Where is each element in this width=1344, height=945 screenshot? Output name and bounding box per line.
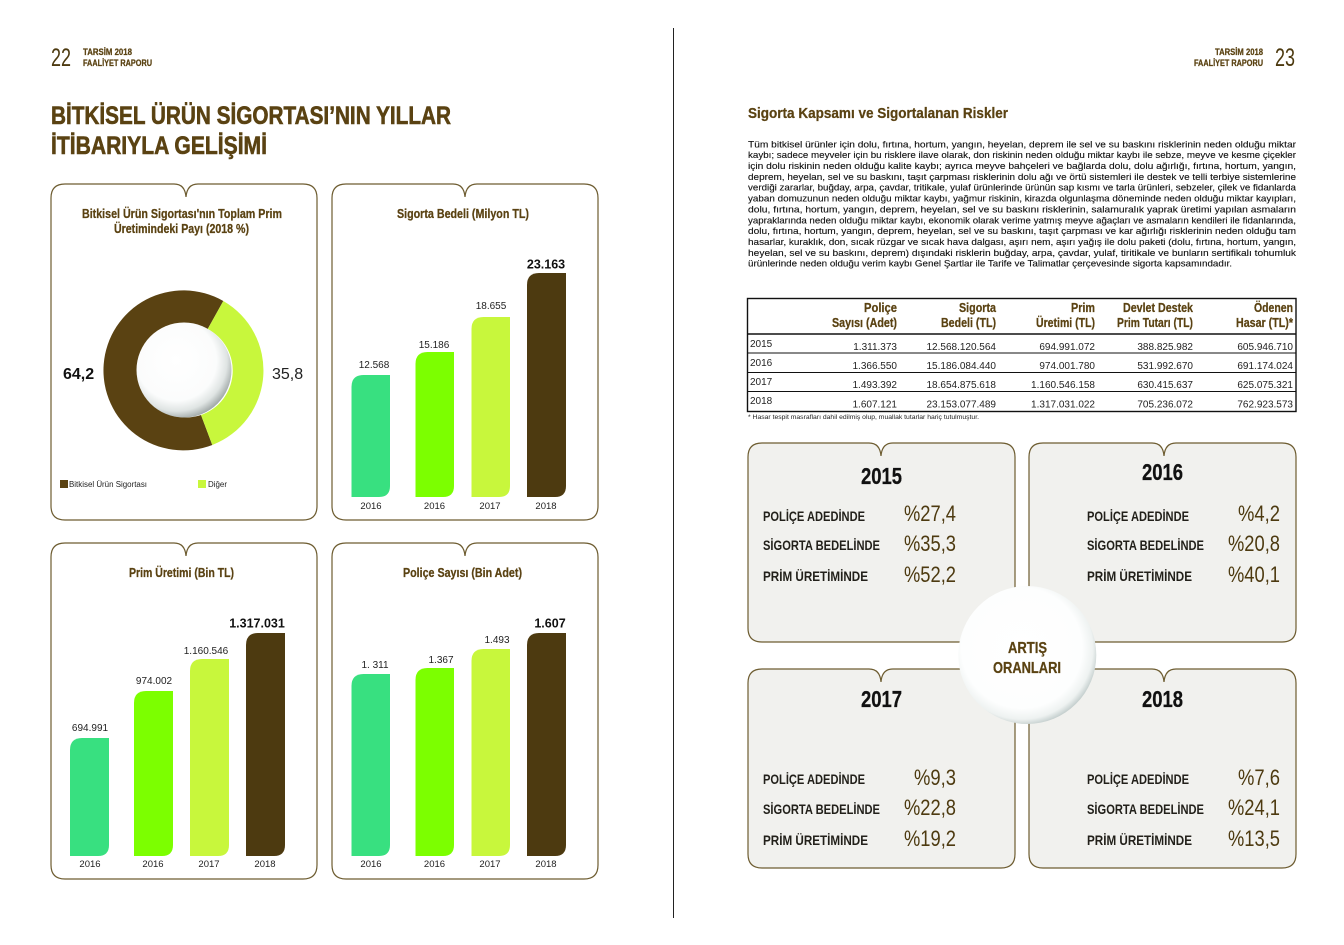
- bars: [70, 633, 285, 856]
- rates: %35,3: [904, 531, 956, 556]
- rates: POLİÇE ADEDİNDE: [763, 771, 865, 787]
- rates: POLİÇE ADEDİNDE: [1087, 771, 1189, 787]
- rates: [763, 765, 956, 851]
- panel: 2015 rates: [748, 443, 1015, 642]
- table header: Prim Tutarı (TL): [1117, 316, 1193, 330]
- table header: Poliçe: [864, 301, 897, 315]
- table row 2016: [750, 358, 1293, 372]
- rates: %7,6: [1238, 765, 1280, 790]
- rates: %52,2: [904, 562, 956, 587]
- bar years: 2016: [360, 501, 382, 512]
- bar values: 12.568: [359, 360, 390, 371]
- table header: Devlet Destek: [1123, 301, 1193, 315]
- rates: SİGORTA BEDELİNDE: [763, 537, 880, 553]
- bar values: 1.317.031: [229, 616, 285, 630]
- page header right: [1194, 44, 1295, 72]
- table row 2018: 23.153.077.489: [926, 400, 996, 410]
- body text: verdiği zararlar, buğday, arpa, çavdar, tritikale, yulaf ürünlerinde ürünün sap kısmı ve tarla ürünleri, sebzeler, çilek ve fidanlarda: [748, 183, 1296, 193]
- main title: BİTKİSEL ÜRÜN SİGORTASI’NIN YILLAR: [51, 101, 451, 130]
- table row 2018: 1.317.031.022: [1031, 400, 1095, 410]
- table row 2015: 388.825.982: [1137, 342, 1193, 353]
- table row 2016: 15.186.084.440: [926, 361, 996, 372]
- table row 2017: 625.075.321: [1237, 380, 1293, 391]
- rates: PRİM ÜRETİMİNDE: [1087, 568, 1192, 584]
- bar years: [360, 859, 557, 870]
- table header: Sayısı (Adet): [832, 316, 897, 330]
- bar years: 2016: [79, 859, 101, 870]
- table row 2015: 1.311.373: [853, 342, 897, 353]
- body text: heyelan, sel ve su baskını, deprem) dışındaki risklerin buğday, arpa, çavdar, yulaf, tiritikale ve bunların sertifikalı tohumluk: [748, 248, 1297, 258]
- panel: 2018 rates: [1029, 669, 1296, 868]
- table row 2017: 2017: [750, 377, 773, 388]
- rates: POLİÇE ADEDİNDE: [763, 508, 865, 524]
- bar values: [72, 616, 285, 734]
- rates: %22,8: [904, 795, 956, 820]
- table row 2016: 974.001.780: [1039, 361, 1095, 372]
- bar values: 1. 311: [361, 660, 389, 671]
- rates: %9,3: [914, 765, 956, 790]
- section heading: Sigorta Kapsamı ve Sigortalanan Riskler: [748, 105, 1008, 122]
- rates: %4,2: [1238, 501, 1280, 526]
- table header: Ödenen: [1254, 300, 1293, 315]
- bar years: 2016: [360, 859, 382, 870]
- rates: %19,2: [904, 826, 956, 851]
- panel: Poliçe Sayısı bar chart: [332, 543, 598, 879]
- rates: [763, 501, 956, 587]
- center badge: ARTIŞ ORANLARI: [958, 586, 1096, 724]
- rates: [1087, 765, 1280, 851]
- table row 2018: [750, 396, 1293, 410]
- table header: Üretimi (TL): [1036, 315, 1095, 330]
- donut value: 35,8: 35,8: [272, 366, 303, 383]
- panel: 2017 rates: [748, 669, 1015, 868]
- table header: Sigorta: [959, 301, 997, 315]
- bar years: 2018: [535, 859, 557, 870]
- panel heading: share: Bitkisel Ürün Sigortası'nın Toplam Prim: [82, 206, 282, 221]
- rates: PRİM ÜRETİMİNDE: [763, 568, 868, 584]
- table header: Prim: [1071, 301, 1095, 315]
- panel heading: Poliçe Sayısı: Poliçe Sayısı (Bin Adet): [403, 566, 522, 580]
- rates: SİGORTA BEDELİNDE: [763, 801, 880, 817]
- table row 2018: 705.236.072: [1137, 400, 1193, 410]
- table header: Bedeli (TL): [941, 316, 996, 330]
- bar values: 1.160.546: [184, 646, 229, 657]
- table row 2018: 2018: [750, 396, 773, 407]
- body text: için dolu riskinin neden olduğu kalite kaybı; ayrıca meyve bahçeleri ve bağlarda dolu, dolu ağırlığı, fırtına, hortum, yangın,: [748, 161, 1296, 171]
- table row 2016: 531.992.670: [1137, 361, 1193, 372]
- table row 2015: [750, 339, 1293, 353]
- bar years: 2016: [142, 859, 164, 870]
- bar years: 2018: [254, 859, 276, 870]
- bar values: 974.002: [136, 676, 173, 687]
- table footnote: * Hasar tespit masrafları dahil edilmiş olup, muallak tutarlar hariç tutulmuştur.: [748, 415, 979, 421]
- bar years: 2017: [479, 501, 501, 512]
- legend: Bitkisel Ürün Sigortası: [69, 480, 147, 489]
- body text: dolu, fırtına, hortum, yangın, deprem, heyelan, sel ve su baskını, taşıt çarpması ve kar ağırlığı risklerinin neden olduğu tam: [748, 226, 1296, 236]
- legend: Diğer: [208, 480, 227, 489]
- bar years: 2016: [424, 859, 445, 870]
- page header right: FAALİYET RAPORU: [1194, 58, 1263, 68]
- rates: %13,5: [1228, 826, 1280, 851]
- year 2017: 2017: [861, 686, 902, 712]
- table row 2016: 1.366.550: [852, 361, 897, 372]
- rates: %20,8: [1228, 531, 1280, 556]
- body text: dolu, fırtına, hortum, yangın, deprem, heyelan, sel ve su baskını risklerinin, salamuralık yaprak üretimi yapılan asmaların: [748, 204, 1296, 214]
- main title: İTİBARIYLA GELİŞİMİ: [51, 132, 267, 160]
- rates: %27,4: [904, 501, 956, 526]
- center badge: ARTIŞ ORANLARI: ORANLARI: [993, 660, 1061, 677]
- table row 2017: [750, 377, 1293, 391]
- donut chart: [103, 290, 263, 450]
- body text: yapraklarında neden olduğu miktar kaybı, ekonomik olarak verime yatmış meyve ağaçları ve asmaların kendileri ile fidanlarında,: [748, 215, 1296, 225]
- bar values: 23.163: [527, 258, 565, 272]
- table row 2017: 1.160.546.158: [1031, 380, 1095, 391]
- page header left: [51, 44, 152, 72]
- body text: yaban domuzunun neden olduğu miktar kaybı, yağmur riskinin, kirazda olgunlaşma döneminde neden olduğu miktar kayıpları,: [748, 194, 1296, 204]
- legend: [60, 480, 227, 489]
- table row 2017: 630.415.637: [1137, 380, 1193, 391]
- bar values: 694.991: [72, 723, 109, 734]
- page header right: TARSİM 2018: [1215, 47, 1263, 57]
- body text: hasarlar, kuraklık, don, sıcak rüzgar ve sıcak hava dalgası, aşırı nem, aşırı yağış ile dolu paketi (dolu, fırtına, hortum, yangın,: [748, 237, 1296, 247]
- page header left: TARSİM 2018: [83, 47, 132, 57]
- panel heading: Prim Üretimi: Prim Üretimi (Bin TL): [129, 565, 234, 580]
- table row 2017: 1.493.392: [852, 380, 897, 391]
- panel heading: Sigorta Bedeli: Sigorta Bedeli (Milyon TL): [397, 207, 529, 221]
- bar years: [360, 501, 557, 512]
- body text: kaybı; sadece meyveler için bu risklere ilave olarak, don riskinin neden olduğu miktar kaybı ile sebze, meyve ve kesme çiçekler: [748, 150, 1296, 160]
- donut value: 64,2: 64,2: [63, 366, 94, 383]
- rates: SİGORTA BEDELİNDE: [1087, 801, 1204, 817]
- bar values: 1.607: [534, 616, 566, 630]
- rates: %24,1: [1228, 795, 1280, 820]
- body text: [748, 139, 1297, 269]
- year 2018: 2018: [1142, 686, 1183, 712]
- rates: %40,1: [1228, 562, 1280, 587]
- bar years: 2017: [479, 859, 501, 870]
- bar years: 2016: [424, 501, 445, 512]
- center badge: ARTIŞ ORANLARI: ARTIŞ: [1008, 640, 1047, 657]
- page header left: FAALİYET RAPORU: [83, 58, 152, 68]
- table row 2016: 2016: [750, 358, 773, 369]
- bar years: 2018: [535, 501, 557, 512]
- rates: [1087, 501, 1280, 587]
- rates: POLİÇE ADEDİNDE: [1087, 508, 1189, 524]
- table row 2015: 12.568.120.564: [926, 342, 996, 353]
- panel: donut chart share of premium: [51, 184, 317, 520]
- panel: 2016 rates: [1029, 443, 1296, 642]
- bar years: 2017: [198, 859, 220, 870]
- bars: [352, 273, 566, 497]
- rates: SİGORTA BEDELİNDE: [1087, 537, 1204, 553]
- body text: ürünlerinde neden olduğu verim kaybı Genel Şartlar ile Tarife ve Talimatlar çerçevesinde sigorta kapsamındadır.: [748, 259, 1232, 269]
- main title: [51, 101, 451, 160]
- page header right: 23: [1275, 44, 1295, 72]
- table row 2017: 18.654.875.618: [926, 380, 996, 391]
- year 2016: 2016: [1142, 459, 1183, 485]
- table row 2016: 691.174.024: [1237, 361, 1293, 372]
- bar values: [359, 258, 565, 371]
- data table: [747, 298, 1296, 412]
- body text: deprem, heyelan, sel ve su baskını, taşıt çarpması risklerinin dolu ağı ve örtü sistemleri ile destek ve telli terbiye sistemlerine: [748, 172, 1296, 182]
- page header left: 22: [51, 44, 71, 72]
- table row 2015: 694.991.072: [1039, 342, 1095, 353]
- bar values: 1.367: [428, 655, 454, 666]
- table row 2015: 605.946.710: [1237, 342, 1293, 353]
- panel: Sigorta Bedeli bar chart: [332, 184, 598, 520]
- bar values: 1.493: [484, 635, 510, 646]
- panel heading: share: Üretimindeki Payı (2018 %): [114, 221, 249, 236]
- panel heading: share: [82, 206, 282, 236]
- rates: PRİM ÜRETİMİNDE: [1087, 832, 1192, 848]
- year 2015: 2015: [861, 463, 902, 489]
- bar values: [361, 616, 566, 671]
- body text: Tüm bitkisel ürünler için dolu, fırtına, hortum, yangın, heyelan, deprem ile sel ve su baskını risklerinin neden olduğu miktar: [748, 139, 1296, 149]
- bar values: 15.186: [419, 340, 450, 351]
- bars: [352, 633, 566, 856]
- table header: Hasar (TL)*: [1236, 316, 1293, 330]
- table row 2015: 2015: [750, 339, 773, 350]
- table row 2018: 1.607.121: [852, 400, 897, 410]
- bar values: 18.655: [476, 301, 507, 312]
- panel: Prim Üretimi bar chart: [51, 543, 317, 879]
- table header: [832, 300, 1293, 330]
- bar years: [79, 859, 276, 870]
- rates: PRİM ÜRETİMİNDE: [763, 832, 868, 848]
- table row 2018: 762.923.573: [1237, 400, 1293, 410]
